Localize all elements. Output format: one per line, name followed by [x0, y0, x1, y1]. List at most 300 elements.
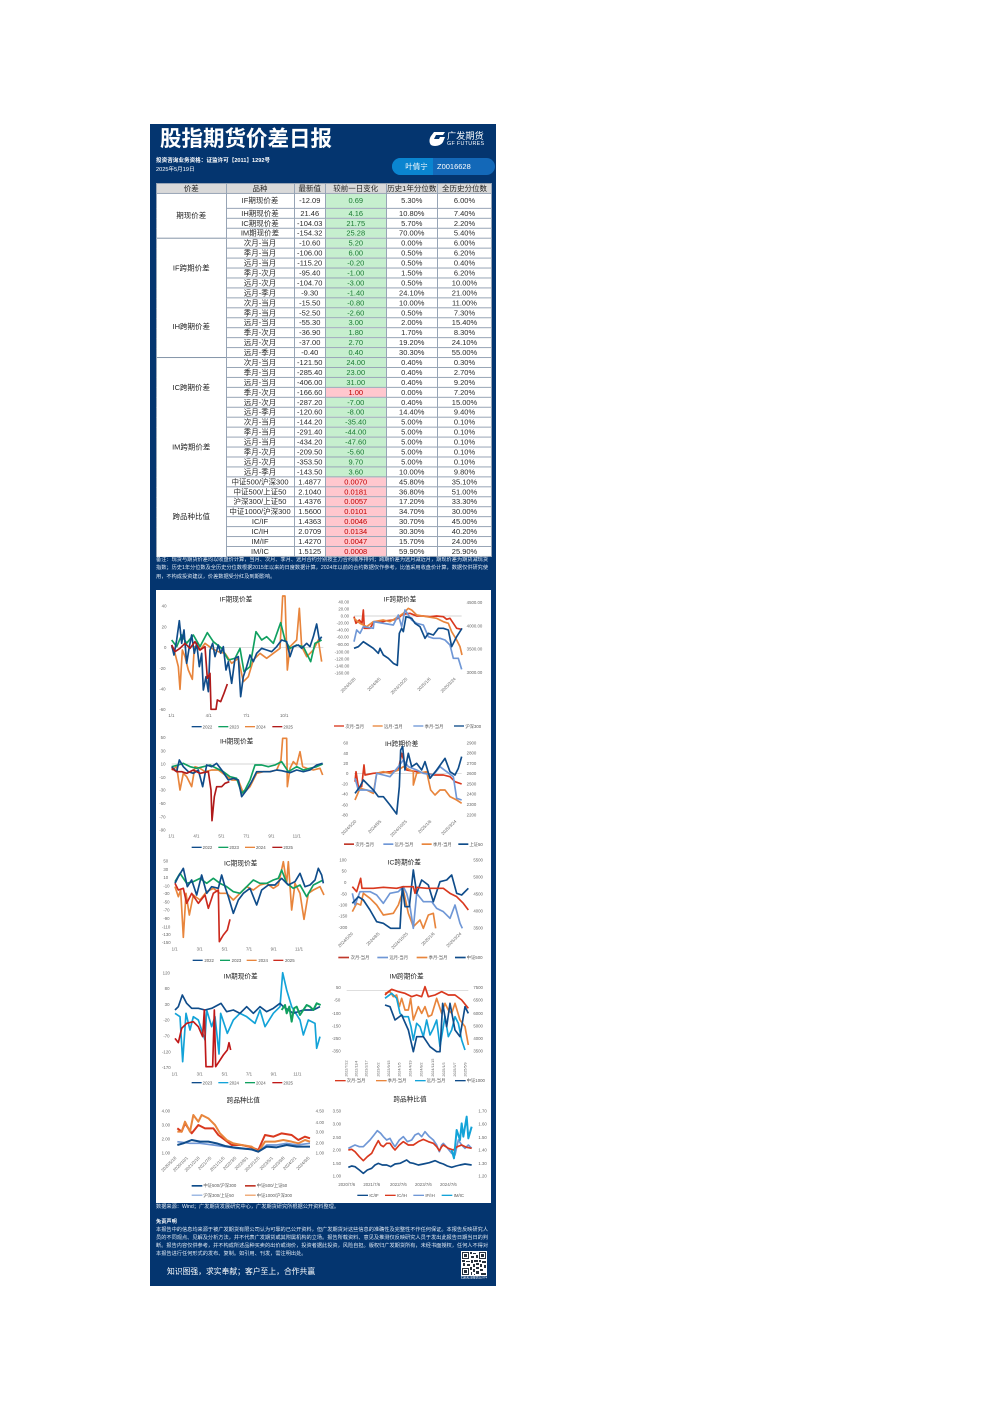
data table: 3.00	[348, 318, 363, 327]
data table: 远月-次月	[244, 338, 276, 347]
data table: 0.40%	[401, 377, 422, 386]
data table: 7.40%	[454, 208, 475, 217]
logo: GF Futures: GF FUTURES	[447, 141, 484, 147]
chart: IF basis: 20	[162, 624, 167, 629]
data table: 品种	[252, 183, 268, 192]
chart: IH calendar spreads: 2500	[467, 782, 477, 787]
data table: 0.40%	[401, 358, 422, 366]
legend: 中证1000/沪深300	[257, 1192, 293, 1199]
chart: IF basis: -40	[159, 686, 166, 691]
data table: IC/IH	[251, 527, 269, 536]
data table: 0.00%	[401, 238, 422, 247]
legend	[193, 958, 295, 963]
chart: futures ratio: 跨品种比值	[393, 1095, 427, 1104]
chart: IF calendar spreads: 2024/10/25	[390, 676, 409, 695]
data table: 1.80	[348, 328, 363, 337]
data table: 0.40%	[401, 397, 422, 406]
chart: IC calendar spreads: 5000	[473, 874, 484, 879]
chart: IM calendar spreads: 6000	[473, 1011, 484, 1016]
chart: IM calendar spreads: 2024/8/2	[420, 1062, 424, 1077]
chart: IC calendar spreads: 3500	[473, 925, 484, 930]
data table: 季月-当月	[244, 427, 276, 436]
chart: IC basis: -50	[163, 899, 170, 904]
chart: IM basis: -70	[163, 1034, 170, 1039]
data table: 1.70%	[401, 328, 422, 337]
data table: 跨品种比值	[172, 512, 210, 521]
chart: futures ratio: 3.50	[333, 1108, 342, 1113]
data table: 5.00%	[401, 417, 422, 426]
legend	[334, 723, 482, 730]
data table: 15.70%	[399, 537, 424, 545]
chart: IH basis: 1/1	[168, 834, 175, 839]
data table: -55.30	[299, 318, 320, 327]
data table: 9.20%	[454, 377, 475, 386]
charts panel background	[156, 590, 491, 1203]
data table: 6.00	[348, 248, 363, 257]
chart: IF calendar spreads: 3500.00	[467, 647, 483, 652]
chart: IM calendar spreads: -150	[332, 1023, 341, 1028]
data table: IM跨期价差	[172, 442, 210, 451]
chart: IH basis: -50	[159, 801, 166, 806]
data table: 期现价差	[176, 211, 206, 220]
chart: IH calendar spreads: IH跨期价差	[385, 739, 419, 748]
chart: IC basis: 7/1	[246, 947, 253, 952]
data table: 1.50%	[401, 268, 422, 277]
legend: 2025	[283, 724, 294, 729]
legend	[192, 724, 294, 729]
slogan: 知识图强，求实奉献；客户至上，合作共赢	[167, 1267, 315, 1276]
legend: 季月-当月	[388, 1077, 406, 1084]
data table: 远月-当月	[244, 258, 276, 267]
chart: IM calendar spreads: 50	[336, 985, 341, 990]
data table: IH期现价差	[241, 208, 279, 217]
legend: 季月-当月	[429, 954, 447, 961]
data table: 19.20%	[399, 338, 424, 347]
data table: IF期现价差	[242, 196, 278, 205]
chart: IF basis: 1/1	[168, 713, 175, 718]
data table: -144.20	[297, 417, 322, 426]
data table: 10.00%	[399, 467, 424, 476]
data table: 6.00%	[454, 196, 475, 205]
chart: IM calendar spreads: 2022/11/4	[354, 1061, 358, 1077]
chart: IM calendar spreads: -50	[334, 998, 341, 1003]
data table: IC跨期价差	[172, 383, 210, 392]
disclaimer: 本报告中的信息均来源于被广发期货有限公司认为可靠的已公开资料，但广发期货对这些信息的准确性及完整性不作任何保证。本报告反映研究人员的不同观点、见解及分析方法，并不代表广发期货或其附属机构的立场。报告所载资料、意见及推测仅反映研究人员于发出此报告日期当日的判断。报告内容仅供参考，并不构成所述品种买卖的出价或询价，投资者据此投资，风险自担。版权归广发期货所有，未经书面授权，任何人不得对本报告进行任何形式的发布、复制。如引用、刊发，需注明出处。	[156, 1227, 488, 1257]
legend: 2024	[258, 958, 269, 963]
data table: 0.10%	[454, 427, 475, 436]
chart: IF calendar spreads: -20.00	[337, 621, 350, 626]
chart: IH calendar spreads: 2200	[467, 813, 477, 818]
data table: -115.20	[297, 258, 322, 267]
QR code	[461, 1251, 487, 1279]
legend	[335, 1077, 486, 1084]
chart: index ratio: 跨品种比值	[227, 1095, 260, 1104]
chart: IM calendar spreads: 2024/4/19	[409, 1060, 413, 1077]
chart: IM basis: IM期现价差	[224, 972, 258, 981]
qualification and date text	[156, 156, 270, 172]
data table: -291.40	[297, 427, 322, 436]
legend: IC/IH	[397, 1193, 407, 1198]
chart: IF calendar spreads: 40.00	[338, 600, 350, 605]
chart: futures ratio: 1.70	[478, 1108, 487, 1113]
data table: 24.00	[346, 358, 365, 366]
data table: -434.20	[297, 437, 322, 446]
chart: IC basis: 50	[163, 859, 169, 864]
chart: IF calendar spreads: 4500.00	[467, 600, 483, 605]
data table: 6.20%	[454, 248, 475, 257]
chart: futures ratio: 2.50	[333, 1135, 342, 1140]
data table: -353.50	[297, 457, 322, 466]
chart: IH basis: 5/1	[218, 834, 225, 839]
data table: 0.40%	[454, 258, 475, 267]
legend: 中证500	[467, 954, 483, 961]
chart: IH basis: 50	[161, 735, 166, 740]
data table: 最新值	[298, 183, 321, 192]
data table: -0.40	[301, 348, 318, 357]
chart: IH calendar spreads: 2024/8/5	[367, 818, 383, 834]
chart: IF calendar spreads: -40.00	[337, 628, 350, 633]
chart: IH basis: 4/1	[193, 834, 200, 839]
data table: 中证500/沪深300	[231, 477, 289, 486]
chart: IM basis: 1/1	[172, 1072, 178, 1077]
chart: IM calendar spreads	[332, 972, 486, 1084]
chart: IH calendar spreads: 2600	[467, 771, 477, 776]
chart: IM basis: 30	[165, 1002, 170, 1007]
blue report panel	[150, 124, 496, 1286]
chart: IF calendar spreads: -140.00	[335, 663, 350, 668]
chart: IM basis: 5/1	[222, 1072, 228, 1077]
chart: IM basis: 120	[163, 970, 170, 975]
chart: index ratio: 2022/12/5	[244, 1155, 261, 1173]
data table: 远月-当月	[244, 437, 276, 446]
data table: -143.50	[297, 467, 322, 476]
chart: IF calendar spreads: 2025/1/6	[416, 676, 432, 692]
chart: IM calendar spreads: 3500	[473, 1048, 484, 1053]
chart: IH basis: 7/1	[243, 834, 250, 839]
chart: IC calendar spreads: 2025/1/6	[420, 931, 436, 947]
data table: 远月-季月	[244, 407, 276, 416]
chart: IC basis: 10	[163, 875, 169, 880]
data table: IM期现价差	[241, 228, 279, 237]
legend: 2023	[229, 724, 240, 729]
chart: futures ratio: 1.00	[333, 1174, 342, 1179]
chart: IF calendar spreads: -80.00	[337, 642, 350, 647]
data table: 51.00%	[452, 487, 477, 496]
data table: 2.0709	[298, 527, 321, 536]
data table: IF跨期价差	[173, 263, 210, 272]
data table: -47.60	[345, 437, 366, 446]
data table: 季月-次月	[244, 328, 276, 337]
data table: -37.00	[299, 338, 320, 347]
chart: IC basis: 30	[163, 867, 169, 872]
chart: IH basis: 10	[161, 762, 166, 767]
chart: IM basis: 7/1	[246, 1072, 253, 1077]
data table: 远月-当月	[244, 318, 276, 327]
data table: 0.10%	[454, 417, 475, 426]
chart: index ratio: 2022/3/5	[222, 1155, 238, 1171]
chart: IC calendar spreads: -200	[339, 925, 348, 930]
chart: IH calendar spreads: 40	[343, 751, 349, 756]
chart: IF calendar spreads: 2025/3/24	[440, 676, 457, 694]
data table: 45.80%	[399, 477, 424, 486]
legend: 沪深300	[465, 723, 482, 730]
legend: 2022	[203, 845, 213, 850]
data table: 0.0057	[344, 497, 367, 506]
chart: IM basis: -120	[162, 1050, 171, 1055]
qualification and date text: 投资咨询业务资格：证监许可【2011】1292号	[156, 158, 270, 164]
chart: IC calendar spreads: 4000	[473, 908, 484, 913]
data table: 较前一日变化	[333, 183, 378, 192]
data table: 0.40%	[401, 367, 422, 376]
chart: IH calendar spreads: 2400	[467, 792, 477, 797]
chart: IM calendar spreads: 2023/6/2	[376, 1062, 380, 1077]
data table: 0.0181	[344, 487, 367, 496]
chart: IF calendar spreads: 2024/5/20	[340, 676, 357, 694]
chart: IM calendar spreads: -350	[332, 1048, 341, 1053]
data table: 中证500/上证50	[234, 487, 286, 496]
chart: IF basis: 4/1	[206, 713, 212, 718]
data table: 5.00%	[401, 447, 422, 456]
data table: 0.50%	[401, 308, 422, 317]
data table: 40.20%	[452, 527, 477, 536]
data table: -154.32	[297, 228, 322, 237]
chart: IH basis: IH期现价差	[220, 737, 254, 746]
chart: IC calendar spreads: -50	[341, 892, 348, 897]
data table: 次月-当月	[244, 238, 276, 247]
chart: IM calendar spreads: 2023/9/15	[387, 1060, 391, 1077]
data table: 8.30%	[454, 328, 475, 337]
data table: 23.00	[346, 367, 365, 376]
data table: IC/IF	[252, 517, 268, 526]
data table: 7.30%	[454, 308, 475, 317]
chart: index ratio: 2023/9/8	[270, 1155, 286, 1171]
data table: 次月-当月	[244, 417, 276, 426]
chart: IC calendar spreads: -150	[339, 914, 348, 919]
chart: IF basis: 7/1	[243, 713, 250, 718]
chart: IM calendar spreads: 2023/2/17	[364, 1060, 368, 1077]
legend: 2025	[283, 1080, 294, 1085]
data table: 2.1040	[298, 487, 321, 496]
data table: -0.20	[347, 258, 364, 267]
chart: futures ratio: 1.20	[478, 1174, 487, 1179]
chart: IF calendar spreads: IF跨期价差	[384, 594, 417, 603]
data table: -1.00	[347, 268, 364, 277]
chart: IC calendar spreads: 2024/10/25	[390, 931, 409, 950]
legend: 2024	[229, 1080, 240, 1085]
data table: 5.00%	[401, 457, 422, 466]
chart: IF calendar spreads: -120.00	[335, 656, 350, 661]
chart: IF calendar spreads: 0.00	[341, 614, 350, 619]
data table: -12.09	[299, 196, 320, 205]
data table: 11.00%	[452, 298, 477, 307]
data table: 远月-季月	[244, 288, 276, 297]
data table: -35.40	[345, 417, 366, 426]
legend: 中证500/沪深300	[203, 1182, 237, 1189]
legend	[344, 841, 483, 848]
data table: -406.00	[297, 377, 322, 386]
data table: 季月-次月	[244, 447, 276, 456]
chart: IC basis	[162, 859, 324, 963]
data table: 10.00%	[452, 278, 477, 287]
chart: IC calendar spreads: -100	[339, 903, 348, 908]
data table: -44.00	[345, 427, 366, 436]
legend: 中证500/上证50	[257, 1182, 288, 1189]
data table: 价差	[184, 183, 199, 192]
data table: IC期现价差	[241, 218, 279, 227]
chart: IH calendar spreads: -20	[342, 782, 349, 787]
data table: 季月-当月	[244, 248, 276, 257]
data table: 1.4363	[298, 517, 321, 526]
chart: IM calendar spreads: 5000	[473, 1023, 484, 1028]
data table: 35.10%	[452, 477, 477, 486]
chart: index ratio: 3.00	[162, 1123, 171, 1128]
data table: 0.10%	[454, 437, 475, 446]
data table: 24.10%	[399, 288, 424, 297]
data table: 9.70	[348, 457, 363, 466]
data table: 0.30%	[454, 358, 475, 366]
chart: IC calendar spreads: 2025/3/24	[445, 931, 463, 948]
data table: -104.03	[297, 218, 322, 227]
legend: 2022	[204, 958, 215, 963]
data table: 30.30%	[399, 348, 424, 357]
table note: 备注：现货与期货价差均以收盘价计算，当月、次月、季月、远月合约分别按主力合约顺序排列；跨期价差为远月减近月，期现价差为期货减现货指数；历史1年分位数及全历史分位数根据2015年以来的日度数据计算，2024年以前的合约数据仅作参考，比值采用收盘价计算，数据仅供研究使用，不构成投资建议，价差数据受分红及到期影响。	[156, 557, 488, 580]
data table: 远月-当月	[244, 377, 276, 386]
data table: 1.5125	[298, 546, 321, 555]
chart: IH calendar spreads: -80	[342, 813, 349, 818]
chart: IF calendar spreads: 4000.00	[467, 623, 483, 628]
chart: index ratio: 2.00	[162, 1136, 171, 1141]
legend: 2025	[285, 958, 295, 963]
legend	[338, 954, 483, 961]
legend: IM/IC	[454, 1193, 464, 1198]
data table: 沪深300/上证50	[234, 497, 286, 506]
chart: IC basis: -90	[163, 916, 170, 921]
chart: IH basis	[159, 735, 323, 850]
data table: IH跨期价差	[172, 322, 210, 331]
data table: -36.90	[299, 328, 320, 337]
chart: IM basis: 3/1	[197, 1072, 203, 1077]
chart: futures ratio: 1.50	[333, 1161, 342, 1166]
data table: -5.60	[347, 447, 364, 456]
chart: index ratio: 2023/5/1	[259, 1155, 274, 1171]
data table: 24.10%	[452, 338, 477, 347]
legend: 远月-当月	[395, 841, 413, 848]
chart: IH basis: 30	[161, 748, 166, 753]
data table: 0.0070	[344, 477, 367, 486]
chart: IH basis: -90	[159, 828, 166, 833]
data table: 4.16	[348, 208, 363, 217]
chart: IC calendar spreads: 2024/5/20	[337, 931, 354, 948]
chart: index ratio: 2021/2/18	[184, 1155, 201, 1173]
data table: -285.40	[297, 367, 322, 376]
legend: 中证1000	[467, 1077, 486, 1084]
data table: -3.00	[347, 278, 364, 287]
chart: index ratio: 1.00	[316, 1150, 325, 1155]
data table: -10.60	[299, 238, 320, 247]
chart: index ratio: 2021/7/5	[197, 1155, 213, 1171]
data table: 2.20%	[454, 218, 475, 227]
data table: 次月-当月	[244, 358, 276, 366]
chart: IM calendar spreads: -100	[332, 1011, 341, 1016]
data table: 30.70%	[399, 517, 424, 526]
chart: IC basis: -10	[163, 883, 170, 888]
data table: 5.00%	[401, 437, 422, 446]
chart: IM basis: -170	[162, 1065, 171, 1070]
legend: IC/IF	[369, 1193, 379, 1198]
data table: 5.30%	[401, 196, 422, 205]
title: 股指期货价差日报	[160, 127, 332, 151]
data table: -166.60	[297, 387, 322, 396]
data table: 36.80%	[399, 487, 424, 496]
chart: IC calendar spreads: 50	[342, 869, 347, 874]
chart: IM calendar spreads: 6500	[473, 998, 484, 1003]
data table: 远月-季月	[244, 467, 276, 476]
chart: IH calendar spreads: 2800	[467, 750, 477, 755]
legend: 远月-当月	[389, 954, 408, 961]
chart: IH calendar spreads: 2025/3/24	[440, 818, 458, 836]
chart: IM calendar spreads: 2025/5/9	[464, 1062, 468, 1077]
chart: IC basis: -30	[163, 891, 170, 896]
chart: IF calendar spreads: -60.00	[337, 635, 350, 640]
chart: IC calendar spreads: IC跨期价差	[388, 857, 421, 866]
data table: -121.50	[297, 358, 322, 366]
data table: -104.70	[297, 278, 322, 287]
chart: IC basis: IC期现价差	[224, 859, 258, 868]
chart: IH calendar spreads: 2300	[467, 802, 477, 807]
logo: GF Futures	[430, 131, 484, 147]
data table: -209.50	[297, 447, 322, 456]
data table: -15.50	[299, 298, 320, 307]
data table: -52.50	[299, 308, 320, 317]
data table: -287.20	[297, 397, 322, 406]
chart: IH calendar spreads: -60	[342, 803, 349, 808]
chart: IH calendar spreads: 60	[343, 740, 349, 745]
data table: 全历史分位数	[442, 183, 487, 192]
chart: IC basis: 11/1	[295, 947, 304, 952]
chart: IM basis: 11/1	[293, 1072, 302, 1077]
chart: IM basis: -20	[163, 1018, 170, 1023]
data source line: 数据来源：Wind；广发期货发展研究中心，广发期货研究所根据公开资料整理。	[156, 1204, 339, 1210]
chart: futures ratio: 3.00	[333, 1122, 342, 1127]
chart: IH calendar spreads	[340, 739, 483, 848]
data table: 0.10%	[454, 447, 475, 456]
data table: 5.70%	[401, 218, 422, 227]
data table: 远月-次月	[244, 397, 276, 406]
data table: 70.00%	[399, 228, 424, 237]
chart: futures ratio: 2024/7/6	[440, 1182, 457, 1187]
chart: futures ratio: 2020/7/6	[338, 1182, 356, 1187]
legend	[192, 1080, 294, 1085]
data table: 季月-次月	[244, 268, 276, 277]
data table: 15.00%	[452, 397, 477, 406]
chart: IH basis: 11/1	[293, 834, 301, 839]
chart: IM basis	[162, 970, 321, 1085]
data table: 25.28	[346, 228, 365, 237]
data table: -0.80	[347, 298, 364, 307]
data table: 2.00%	[401, 318, 422, 327]
data table: 10.80%	[399, 208, 424, 217]
data table: 30.30%	[399, 527, 424, 536]
legend: 沪深300/上证50	[203, 1192, 234, 1199]
legend	[192, 1182, 293, 1199]
chart: IM calendar spreads: -250	[332, 1036, 341, 1041]
data table: 0.50%	[401, 278, 422, 287]
data table: -106.00	[297, 248, 322, 257]
data table: 0.10%	[454, 457, 475, 466]
chart: IC calendar spreads: 0	[344, 880, 347, 885]
data table: 次月-当月	[244, 298, 276, 307]
legend: 次月-当月	[347, 1077, 365, 1084]
